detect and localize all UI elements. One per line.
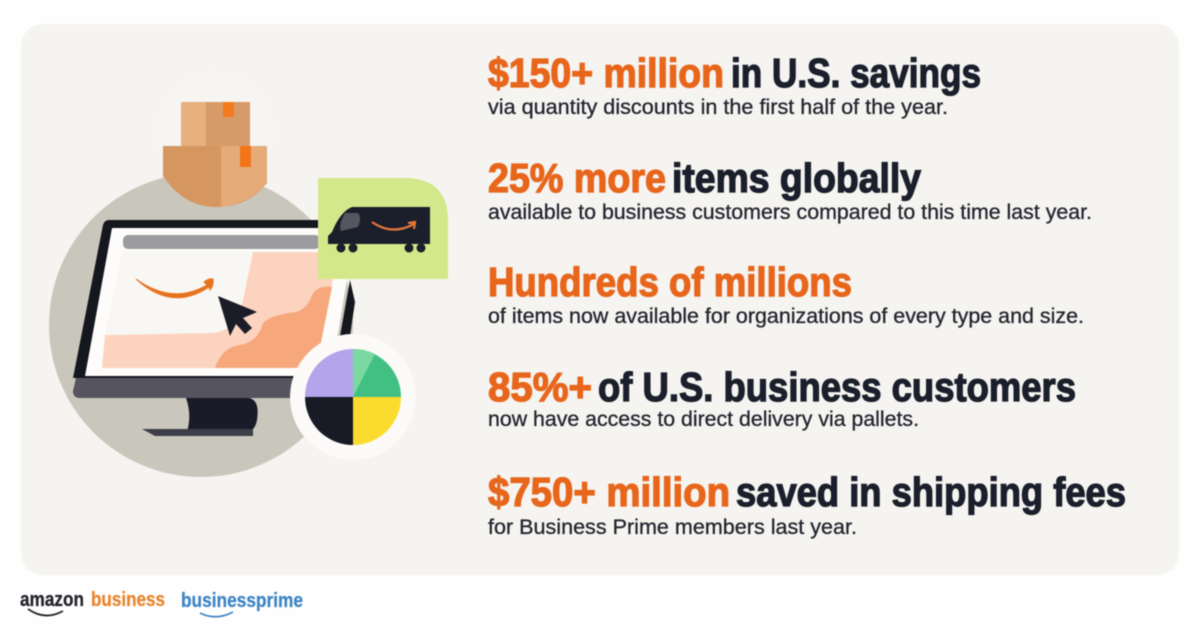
stat 3: of items now available for organizations of every type and size. [488, 304, 1084, 328]
monitor [73, 220, 355, 436]
stat 3 [488, 259, 1084, 328]
stat 3: Hundreds of millions [488, 259, 852, 305]
stat 2: available to business customers compared to this time last year. [488, 200, 1092, 224]
logo: business prime: businessprime [181, 590, 303, 612]
icon: stacked packages [155, 70, 275, 207]
stat 4: of U.S. business customers [598, 364, 1076, 410]
monitor base bar [73, 378, 305, 398]
monitor frame [73, 220, 335, 378]
stat 5: saved in shipping fees [736, 469, 1126, 515]
stat 5 [488, 469, 1126, 539]
logo: amazon business: business [91, 589, 165, 611]
stat 4: now have access to direct delivery via pallets. [488, 407, 919, 431]
pie chart badge [290, 334, 416, 460]
logo: amazon business: amazon [20, 589, 84, 611]
stat 1: $150+ million [488, 50, 724, 96]
stat 1: in U.S. savings [731, 50, 981, 96]
monitor right edge [340, 280, 355, 336]
stat 2: items globally [672, 155, 921, 201]
backdrop circle [49, 173, 353, 477]
stat 2: 25% more [488, 155, 666, 201]
stat 4 [488, 364, 1076, 431]
screen content [102, 252, 338, 368]
stat 5: for Business Prime members last year. [488, 515, 857, 539]
stat 1 [488, 50, 981, 119]
icon: amazon smile on screen [136, 279, 213, 298]
monitor stand [186, 398, 258, 432]
stat 5: $750+ million [488, 469, 730, 515]
browser bar [123, 235, 320, 249]
icon: mouse cursor [218, 296, 257, 336]
illustration: computer with packages, van and chart [49, 70, 448, 477]
logo: amazon business [20, 589, 165, 616]
stat 4: 85%+ [488, 364, 592, 410]
monitor screen [85, 228, 350, 376]
stat 2 [488, 155, 1092, 224]
monitor foot [142, 429, 253, 436]
icon: delivery van tag [318, 178, 448, 279]
stat 1: via quantity discounts in the first half of the year. [488, 95, 948, 119]
